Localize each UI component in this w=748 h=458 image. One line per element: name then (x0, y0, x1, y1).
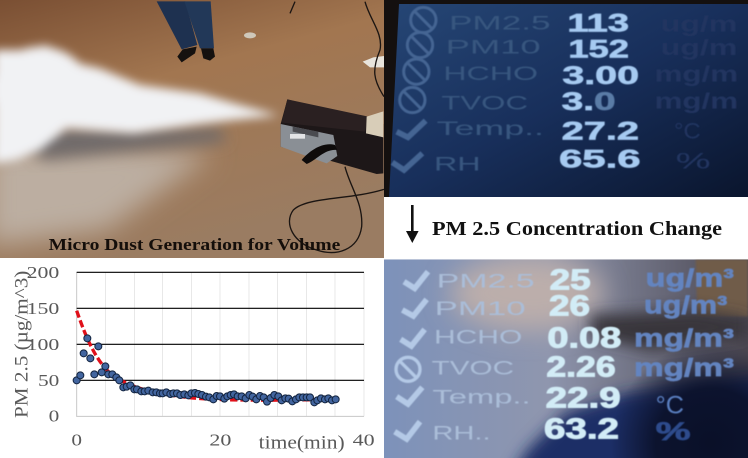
x axis tick labels: 40 (353, 430, 375, 449)
labels: RH (434, 155, 481, 176)
y axis tick labels: 50 (38, 371, 59, 390)
screen reflections (451, 257, 748, 458)
icon: smoke machine (281, 99, 383, 174)
x axis tick labels (71, 430, 375, 449)
units (655, 12, 738, 173)
labels: PM10 (446, 37, 541, 58)
units: mg/m (655, 62, 738, 87)
icons: status (392, 7, 436, 170)
values: 3.00 (562, 63, 639, 90)
values: 113 (567, 11, 629, 38)
y axis tick labels: 0 (49, 406, 59, 425)
carpet haze (0, 143, 213, 247)
axes and horizontal gridlines (77, 272, 364, 416)
units: mg/m³ (634, 354, 734, 382)
values: 63.2 (544, 413, 619, 445)
smoke shadow (13, 128, 227, 160)
units: % (676, 148, 711, 173)
labels: Temp.. (437, 119, 544, 140)
values: 3.0 (562, 89, 616, 116)
icon: legs and shoes (157, 1, 215, 62)
labels: PM10 (435, 299, 526, 320)
labels: HCHO (443, 64, 538, 85)
panel: smoke machine photo (0, 0, 384, 258)
labels: HCHO (434, 327, 522, 348)
y axis tick labels (27, 263, 59, 425)
panel: monitor before (384, 0, 748, 197)
values: 65.6 (559, 147, 641, 174)
caption: Micro Dust Generation for Volume (49, 235, 340, 254)
values (559, 11, 641, 174)
y axis tick labels: 150 (27, 299, 59, 318)
y axis tick labels: 200 (27, 263, 59, 282)
values: 0.08 (547, 323, 621, 355)
icon: cables (289, 2, 384, 252)
panel: PM 2.5 chart (11, 263, 375, 454)
values: 26 (549, 291, 590, 323)
data points (73, 335, 339, 406)
units: ug/m³ (644, 291, 727, 319)
labels: PM2.5 (437, 271, 535, 292)
icons: status (395, 272, 428, 439)
values: 22.9 (546, 382, 621, 414)
units: ug/m³ (646, 265, 734, 293)
smoke plume (0, 45, 279, 163)
labels: PM2.5 (449, 13, 551, 34)
labels (434, 13, 551, 176)
units: ug/m (661, 35, 737, 60)
y axis tick labels: 100 (27, 335, 59, 354)
values: 27.2 (562, 118, 639, 145)
values: 25 (550, 264, 591, 296)
units: % (656, 418, 691, 446)
x axis tick labels: 20 (209, 430, 231, 449)
units: ug/m (661, 12, 737, 37)
panel: monitor after (384, 257, 748, 458)
values: 2.26 (546, 352, 616, 384)
icon: down arrow (406, 205, 419, 243)
x axis title: time(min) (259, 433, 345, 454)
labels: RH.. (432, 423, 491, 444)
values: 152 (568, 36, 629, 63)
labels: TVOC (432, 358, 514, 379)
labels (432, 271, 535, 444)
units: °C (656, 391, 684, 419)
units (634, 265, 734, 446)
units: mg/m³ (634, 325, 734, 353)
heading: PM 2.5 concentration change: PM 2.5 Concentration Change (432, 218, 722, 240)
trend line (77, 311, 335, 400)
units: mg/m (655, 88, 738, 113)
vertical gridlines (105, 272, 364, 416)
screen bezel (384, 0, 748, 197)
y axis title: PM 2.5 (µg/m^3) (11, 271, 32, 418)
values (544, 264, 621, 445)
units: °C (674, 118, 701, 143)
labels: TVOC (441, 93, 528, 114)
labels: Temp.. (432, 387, 531, 408)
icon: floor object and white shoe (244, 32, 384, 67)
x axis tick labels: 0 (71, 430, 82, 449)
